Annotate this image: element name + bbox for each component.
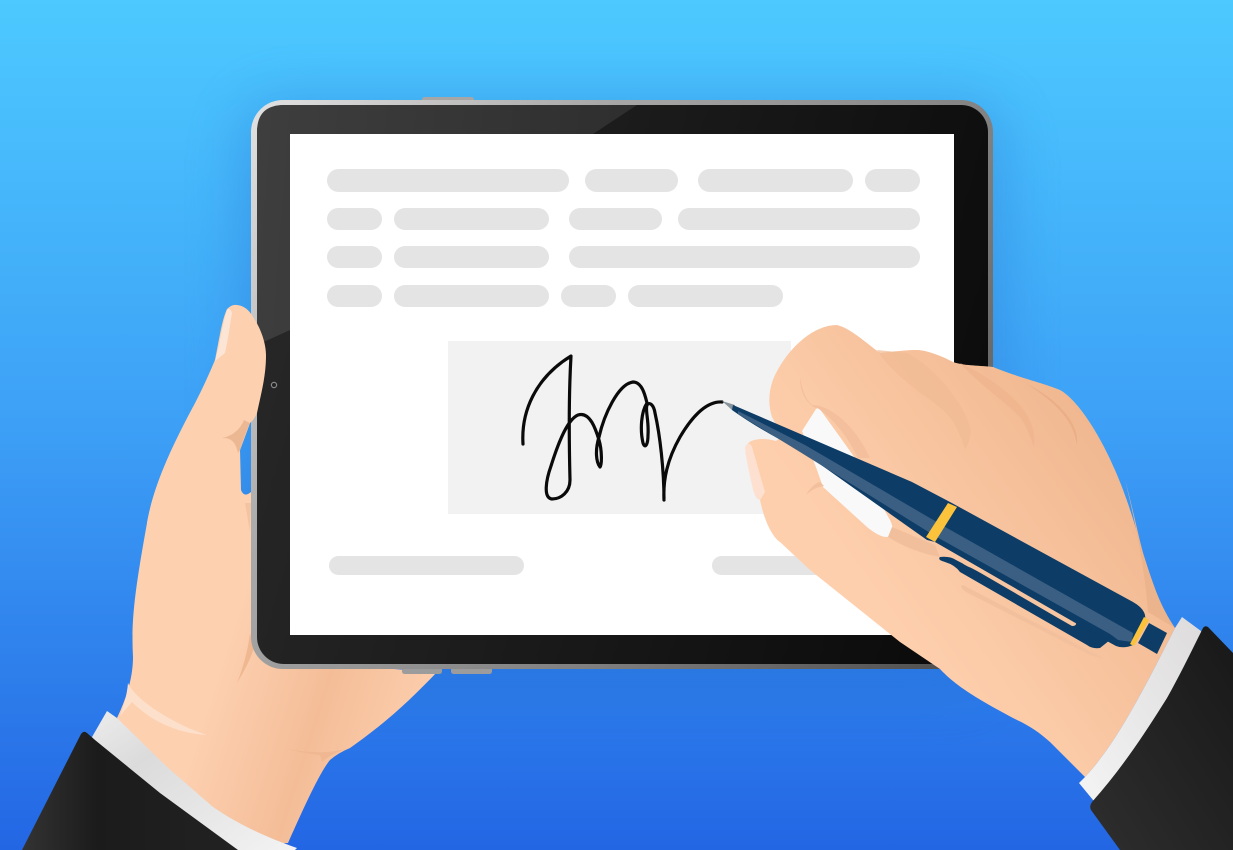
- tablet frame: [251, 100, 993, 669]
- clip slot: [958, 558, 1076, 626]
- left thumb: [147, 305, 266, 523]
- camera: [271, 382, 277, 388]
- wrist highlight: [120, 683, 207, 735]
- right jacket: [1090, 626, 1233, 850]
- thenar vein: [245, 503, 251, 532]
- pen highlight: [738, 411, 1133, 642]
- left jacket: [22, 732, 238, 850]
- pen end cap: [1138, 623, 1167, 654]
- signature: [523, 356, 722, 500]
- gold ring: [926, 503, 957, 542]
- palm vein: [237, 633, 254, 683]
- tablet: [251, 100, 993, 669]
- gap between thumb and fingers: [802, 408, 892, 537]
- left hand palm: [117, 407, 437, 845]
- gold end ring: [1130, 617, 1149, 646]
- knuckle crease 1: [877, 350, 971, 450]
- index finger crease: [800, 377, 870, 458]
- bezel glare: [257, 105, 637, 345]
- pen shadow: [888, 527, 940, 557]
- thumbnail: [745, 444, 765, 500]
- tablet shadow: [240, 100, 1005, 690]
- thumb crease: [806, 482, 824, 495]
- document text placeholder lines: [327, 169, 920, 575]
- thumb crease: [222, 420, 250, 453]
- right shirt cuff: [1079, 617, 1215, 815]
- hand shape: [746, 325, 1175, 777]
- wrist crease: [283, 748, 347, 762]
- signature box: [448, 341, 791, 514]
- pen: [722, 401, 1167, 654]
- knuckle crease 3: [1025, 383, 1077, 445]
- right hand: [745, 325, 1175, 777]
- screen: [290, 134, 954, 635]
- right sleeve: [1079, 617, 1233, 850]
- tablet bezel: [257, 105, 988, 664]
- knuckle crease 2: [960, 363, 1034, 447]
- clip shadow: [961, 585, 1107, 660]
- pen clip: [939, 557, 1110, 648]
- thumbnail highlight: [215, 309, 232, 361]
- left shirt cuff: [92, 711, 297, 850]
- pen body: [732, 405, 1145, 647]
- left sleeve: [22, 711, 297, 850]
- hand edge shading: [1125, 480, 1175, 628]
- pen nib: [722, 401, 735, 410]
- tablet buttons: [402, 97, 492, 674]
